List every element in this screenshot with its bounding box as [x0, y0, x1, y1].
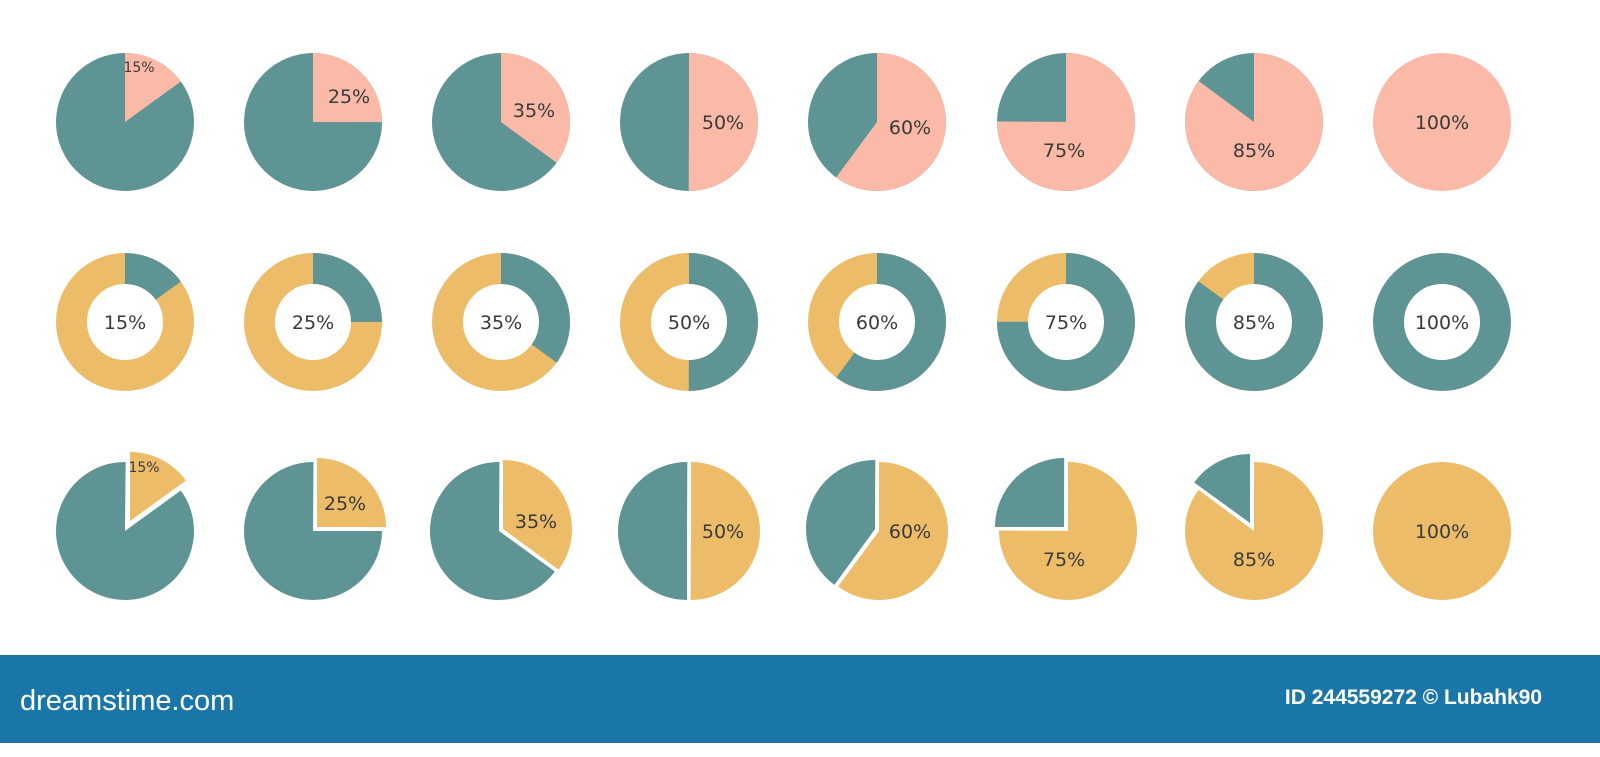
pie 50% [620, 53, 758, 191]
exploded pie 50%: 50% [702, 521, 744, 543]
exploded pie 75%: 75% [1043, 549, 1085, 571]
pie 25%: 25% [328, 86, 370, 108]
pie 85% [1185, 53, 1323, 191]
pie 85%: 85% [1233, 140, 1275, 162]
exploded pie 15% [77, 460, 173, 579]
row 2: donuts [72, 268, 1496, 376]
pie 75% [997, 53, 1135, 191]
exploded pie 60%: 60% [889, 521, 931, 543]
pie 50%: 50% [702, 112, 744, 134]
donut 35%: 35% [480, 312, 522, 334]
donut 85%: 85% [1233, 312, 1275, 334]
exploded pie 85%: 85% [1233, 549, 1275, 571]
exploded pie 60% [827, 481, 931, 577]
exploded pie 25%: 25% [324, 493, 366, 515]
donut 15%: 15% [104, 312, 146, 334]
donut 75%: 75% [1045, 312, 1087, 334]
donut 85% [1200, 268, 1308, 376]
pie 25% [244, 53, 382, 191]
exploded pie 35% [451, 483, 557, 579]
exploded pie 35%: 35% [515, 511, 557, 533]
donut 60% [824, 268, 930, 376]
donut 50%: 50% [668, 312, 710, 334]
exploded pie 25% [278, 492, 366, 566]
donut 60%: 60% [856, 312, 898, 334]
pie 35% [432, 53, 570, 191]
exploded pie 50% [652, 496, 744, 566]
pie 15%: 15% [123, 60, 155, 76]
exploded pie 85% [1202, 475, 1298, 571]
pie 75%: 75% [1043, 140, 1085, 162]
footer band [0, 655, 1600, 743]
row 3: exploded pies [77, 460, 1511, 600]
exploded pie 100%: 100% [1415, 521, 1469, 543]
pie 15% [56, 53, 194, 191]
donut 100%: 100% [1415, 312, 1469, 334]
donut 75% [1012, 268, 1120, 376]
donut 35% [448, 268, 554, 376]
pie 60% [808, 53, 946, 191]
pie 35%: 35% [513, 100, 555, 122]
donut 25%: 25% [292, 312, 334, 334]
pie 60%: 60% [889, 117, 931, 139]
row 1: teal and pink pies [56, 53, 1511, 191]
footer id text: ID 244559272 © Lubahk90 [1285, 686, 1542, 709]
donut 15% [72, 268, 178, 376]
pie 100% [1373, 53, 1511, 191]
pie 100%: 100% [1415, 112, 1469, 134]
footer logo text: dreamstime.com [20, 685, 234, 717]
exploded pie 15%: 15% [128, 460, 160, 476]
exploded pie 100% [1373, 462, 1511, 600]
donut 100% [1388, 268, 1496, 376]
donut 25% [260, 268, 366, 376]
donut 50% [636, 268, 742, 376]
exploded pie 75% [1030, 492, 1102, 571]
